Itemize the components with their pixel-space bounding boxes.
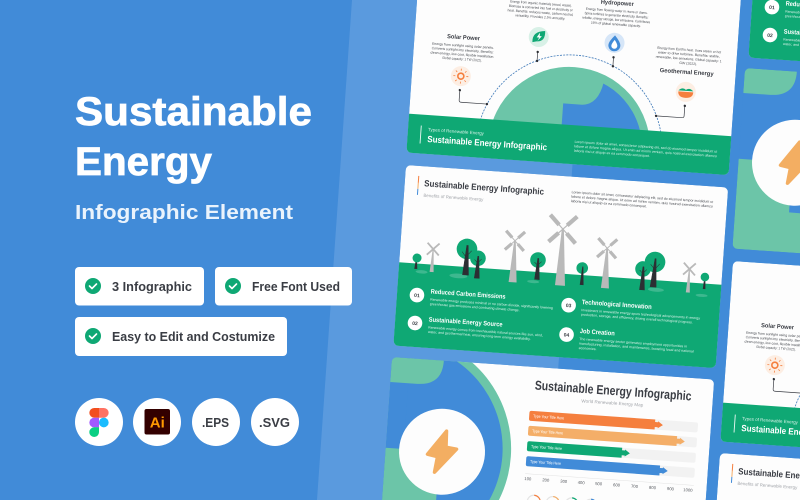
badge: 3 Infographic [75, 267, 204, 306]
right column solar power [741, 322, 800, 393]
icon: EPS format: .EPS [202, 415, 229, 430]
geothermal energy: renewable, low emissions. Global capacity: 1 [656, 55, 722, 63]
chart axis: 700 [631, 483, 639, 489]
chart axis: 400 [578, 480, 586, 485]
icon: lightning bolt in circle [396, 406, 488, 498]
item 01 [409, 287, 554, 315]
icon: Adobe Illustrator: Ai [150, 414, 165, 432]
green footer with title: Lorem ipsum dolor sit amet, consectetur adipiscing elit, sed do eiusmod tempor incididunt ut [574, 140, 717, 154]
icon: Figma [75, 398, 123, 446]
item 03: Technological Innovation [582, 299, 652, 311]
chart axis: 1000 [683, 487, 693, 493]
geothermal energy: Energy from Earth's heat. Uses steam or hot [657, 46, 721, 54]
biomass energy: versatility. Provides 2.5% annually. [515, 13, 565, 21]
green footer with title: laboris nisi ut aliquip ex ea commodo consequat. [574, 149, 650, 158]
geothermal energy [651, 46, 722, 121]
item 01: Reduced Carbon Emissions [430, 289, 506, 301]
right column solar power: Global capacity: 1 TW (2022). [756, 345, 796, 352]
hydropower: Hydropower [601, 0, 635, 8]
chart axis: 100 [524, 476, 532, 482]
green footer with title: Sustainable Energy Infographic [427, 134, 547, 152]
title block [417, 176, 544, 206]
solar power: Converts sunlight into electricity. Benefits: [432, 46, 494, 54]
panel: right column bottom benefits card [707, 453, 800, 500]
bar chart: Type Your Title Here [531, 444, 563, 451]
badge: 3 Infographic: 3 Infographic [112, 279, 192, 294]
item 02: Renewable energy comes from inexhaustible natural sources like sun, wind, [428, 325, 543, 337]
bar chart [526, 411, 698, 478]
chart title: World Renewable Energy Map [581, 398, 644, 408]
right column bottom title [731, 464, 800, 494]
panel: world renewable energy map card [382, 357, 714, 500]
lighter diagonal band [317, 0, 584, 500]
geothermal energy: water to drive turbines. Benefits: stable, [658, 50, 720, 59]
item 03: Investment in renewable energy spurs technological advancements in energy [581, 308, 700, 320]
solar power: Global capacity: 1 TW (2022). [442, 56, 482, 63]
title block: Sustainable Energy Infographic [424, 178, 544, 197]
item 02 [407, 315, 544, 342]
biomass energy [504, 0, 575, 64]
item 02: water, and geothermal heat, ensuring long-term energy availability. [428, 330, 531, 341]
chart axis: 600 [613, 482, 621, 488]
bar chart: Type Your Title Here [533, 413, 565, 421]
intro text: Lorem ipsum dolor sit amet, consectetur adipiscing elit, sed do eiusmod tempor incididunt ut [571, 190, 713, 204]
grass patches [415, 270, 708, 297]
chart axis: 900 [667, 486, 675, 492]
badge: Easy to Edit and Costumize: Easy to Edit and Costumize [112, 329, 275, 344]
geothermal energy: GW (2022). [679, 61, 697, 66]
icon: SVG format [251, 398, 299, 446]
intro text: laboris nisi ut aliquip ex ea commodo consequat. [571, 199, 647, 208]
title block: Benefits of Renewable Energy [423, 193, 484, 202]
item 04: Job Creation [580, 328, 615, 337]
hydropower [579, 0, 652, 70]
right column item 02 [762, 27, 800, 54]
intro text: labore et dolore magna aliqua. Ut enim ad minim veniam, quis nostrud exercitation ullamco [571, 195, 713, 209]
item 04: manufacturing, installation, and maintenance, boosting local and national [579, 342, 694, 354]
right column solar power: Solar Power [761, 323, 795, 331]
chart axis [524, 474, 694, 493]
right column item 01: 01 [769, 5, 775, 11]
heading: Sustainable Energy: Energy [75, 140, 212, 184]
bar chart: Type Your Title Here [532, 428, 564, 436]
item 01: greenhouse gas emissions and combating climate change. [430, 302, 520, 312]
green footer with title: Types of Renewable Energy [428, 127, 485, 136]
right column item 01 [764, 0, 800, 27]
panel: benefits of renewable energy card [391, 165, 730, 371]
bar chart: Type Your Title Here [530, 459, 562, 466]
right column bottom title: Benefits of Renewable Energy [737, 481, 798, 490]
item 01: 01 [414, 293, 420, 299]
biomass energy: heat. Benefits: reduces waste, carbon neutral, [507, 8, 574, 17]
green footer with title: labore et dolore magna aliqua. Ut enim ad minim veniam, quis nostrud exercitation ullamco [574, 144, 717, 158]
chart axis: 500 [595, 481, 603, 487]
hydropower: Energy from flowing water in rivers or dams. [586, 7, 648, 15]
ring charts [527, 495, 598, 500]
solar power: Solar Power [447, 34, 481, 42]
hydropower: Spins turbines to generate electricity. Benefits: [584, 11, 649, 20]
icon: SVG format: .SVG [259, 415, 290, 430]
panel: types of renewable energy card [406, 0, 741, 175]
right column green footer: Types of Renewable Energy [742, 416, 799, 425]
chart title: Sustainable Energy Infographic [534, 378, 692, 403]
hydropower: 16% of global renewable capacity. [591, 21, 641, 28]
badge: Free Font Used: Free Font Used [252, 279, 340, 294]
hydropower: reliable, energy storage, low emissions. Contributes [582, 16, 650, 24]
panel: right column lightning card [732, 68, 800, 271]
item 02: 02 [412, 321, 418, 327]
right column green footer [734, 415, 800, 441]
heading: Sustainable Energy [75, 90, 312, 184]
badge: Free Font Used [215, 267, 352, 306]
chart axis: 200 [542, 477, 550, 483]
solar power: clean energy, low cost, flexible installation. [430, 50, 494, 59]
right column item 02: 02 [767, 33, 773, 39]
icon: Adobe Illustrator [133, 398, 181, 446]
windmills [425, 206, 699, 295]
item 04 [558, 327, 695, 358]
item 03: production, storage, and efficiency, driving overall technological progress. [581, 313, 693, 324]
item 02: Sustainable Energy Source [429, 316, 503, 329]
icon: right column lightning bolt [749, 117, 800, 209]
item 01: Renewable energy produces minimal or no carbon dioxide, significantly lowering [430, 298, 553, 310]
badge: Easy to Edit and Costumize [75, 317, 287, 356]
chart axis: 800 [649, 485, 657, 490]
green footer with title [420, 126, 718, 164]
subheading: Infographic Element [75, 202, 293, 224]
solar power [427, 33, 496, 106]
item 03: 03 [566, 303, 572, 309]
icon: EPS format [192, 398, 240, 446]
item 04: 04 [564, 332, 570, 339]
geothermal energy: Geothermal Energy [659, 68, 714, 78]
chart axis: 300 [560, 479, 568, 484]
panel: right column benefits card, top crop [748, 0, 800, 62]
intro text [571, 190, 713, 213]
biomass energy: Biomass is converted into fuel or electricity or [509, 4, 574, 12]
panel: right column renewable types card [720, 261, 800, 448]
trees [411, 235, 711, 294]
solar power: Energy from sunlight using solar panels. [432, 42, 494, 50]
item 04: The renewable energy sector generates employment opportunities in [579, 337, 687, 349]
item 03 [561, 297, 701, 325]
item 04: economies. [579, 346, 597, 351]
heading: Sustainable Energy: Sustainable [75, 90, 312, 134]
